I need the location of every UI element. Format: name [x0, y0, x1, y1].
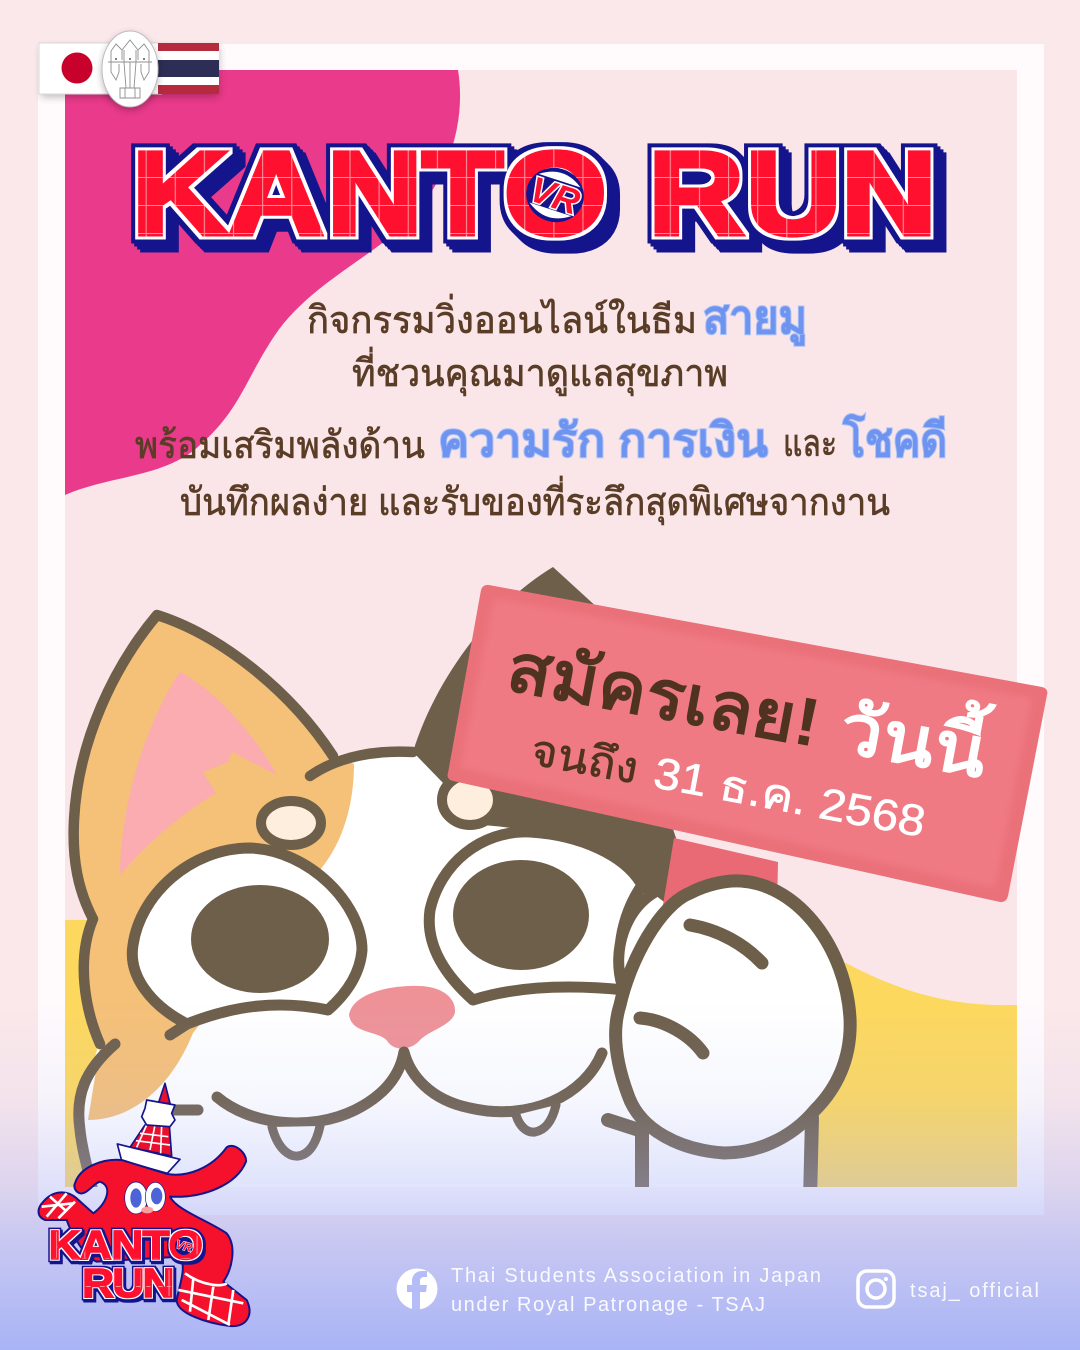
mascot body — [39, 1083, 249, 1326]
description text: บันทึกผลง่าย และรับของที่ระลึกสุดพิเศษจากงาน — [180, 476, 890, 525]
sign text: วันนี้ — [834, 676, 997, 793]
sign — [448, 584, 1048, 905]
mascot logo: KANTO — [49, 1222, 203, 1269]
mascot — [39, 1083, 249, 1326]
tower — [117, 1083, 180, 1173]
icon: instagram — [858, 1271, 894, 1307]
sign text: สมัครเลย! — [501, 629, 826, 762]
VR badge: VR — [525, 168, 585, 223]
description text: กิจกรรมวิ่งออนไลน์ในธีม — [307, 294, 697, 342]
ear outline — [74, 615, 413, 1044]
icon: facebook — [396, 1268, 438, 1310]
description text: และ — [783, 423, 837, 465]
sign text — [490, 615, 997, 856]
inner ear — [120, 672, 277, 875]
facebook name: Thai Students Association in Japan — [451, 1265, 821, 1287]
yellow wave — [65, 920, 1017, 1187]
facebook name — [451, 1265, 821, 1316]
facebook name: under Royal Patronage - TSAJ — [451, 1294, 765, 1316]
cat face — [84, 754, 636, 1187]
description text: สายมู — [703, 291, 807, 346]
description text: ความรัก การเงิน — [438, 414, 769, 466]
right eye — [429, 832, 668, 1000]
sign board — [448, 584, 1048, 902]
mouth — [217, 1052, 602, 1123]
glove and shoe lattice — [42, 1193, 243, 1325]
paw — [608, 881, 850, 1200]
nose — [349, 986, 455, 1049]
title: KANTO RUN: KANTO — [132, 128, 607, 259]
left eye — [132, 848, 362, 1035]
flag: Thailand — [158, 43, 219, 94]
mascot eyes — [125, 1182, 165, 1214]
sign text: จนถึง — [527, 726, 642, 794]
cheek outline — [79, 1044, 198, 1187]
flags and seal — [39, 31, 219, 110]
bottom fade — [0, 1000, 1080, 1350]
description text: โชคดี — [842, 413, 947, 466]
description text: พร้อมเสริมพลังด้าน — [135, 425, 425, 467]
dark right ear — [413, 567, 680, 905]
orange ear and patch — [74, 615, 354, 1120]
instagram handle: tsaj_ official — [910, 1280, 1039, 1302]
title: KANTO RUN — [132, 128, 937, 259]
fangs — [272, 1105, 556, 1156]
title: KANTO RUN: RUN — [648, 128, 937, 259]
description text: ที่ชวนคุณมาดูแลสุขภาพ — [352, 347, 728, 396]
association seal — [102, 31, 158, 110]
cat illustration — [74, 567, 680, 1187]
mascot logo — [49, 1222, 203, 1307]
VR badge — [519, 160, 591, 230]
footer — [396, 1265, 1039, 1316]
sign text: 31 ธ.ค. 2568 — [650, 748, 929, 847]
pink blob — [65, 70, 460, 495]
flag: Japan — [39, 43, 219, 97]
description text — [135, 291, 947, 525]
eyebrow spots — [261, 775, 498, 845]
sign pole — [658, 838, 778, 960]
mascot logo: RUN — [82, 1260, 175, 1307]
mascot VR badge: VR — [174, 1237, 194, 1255]
